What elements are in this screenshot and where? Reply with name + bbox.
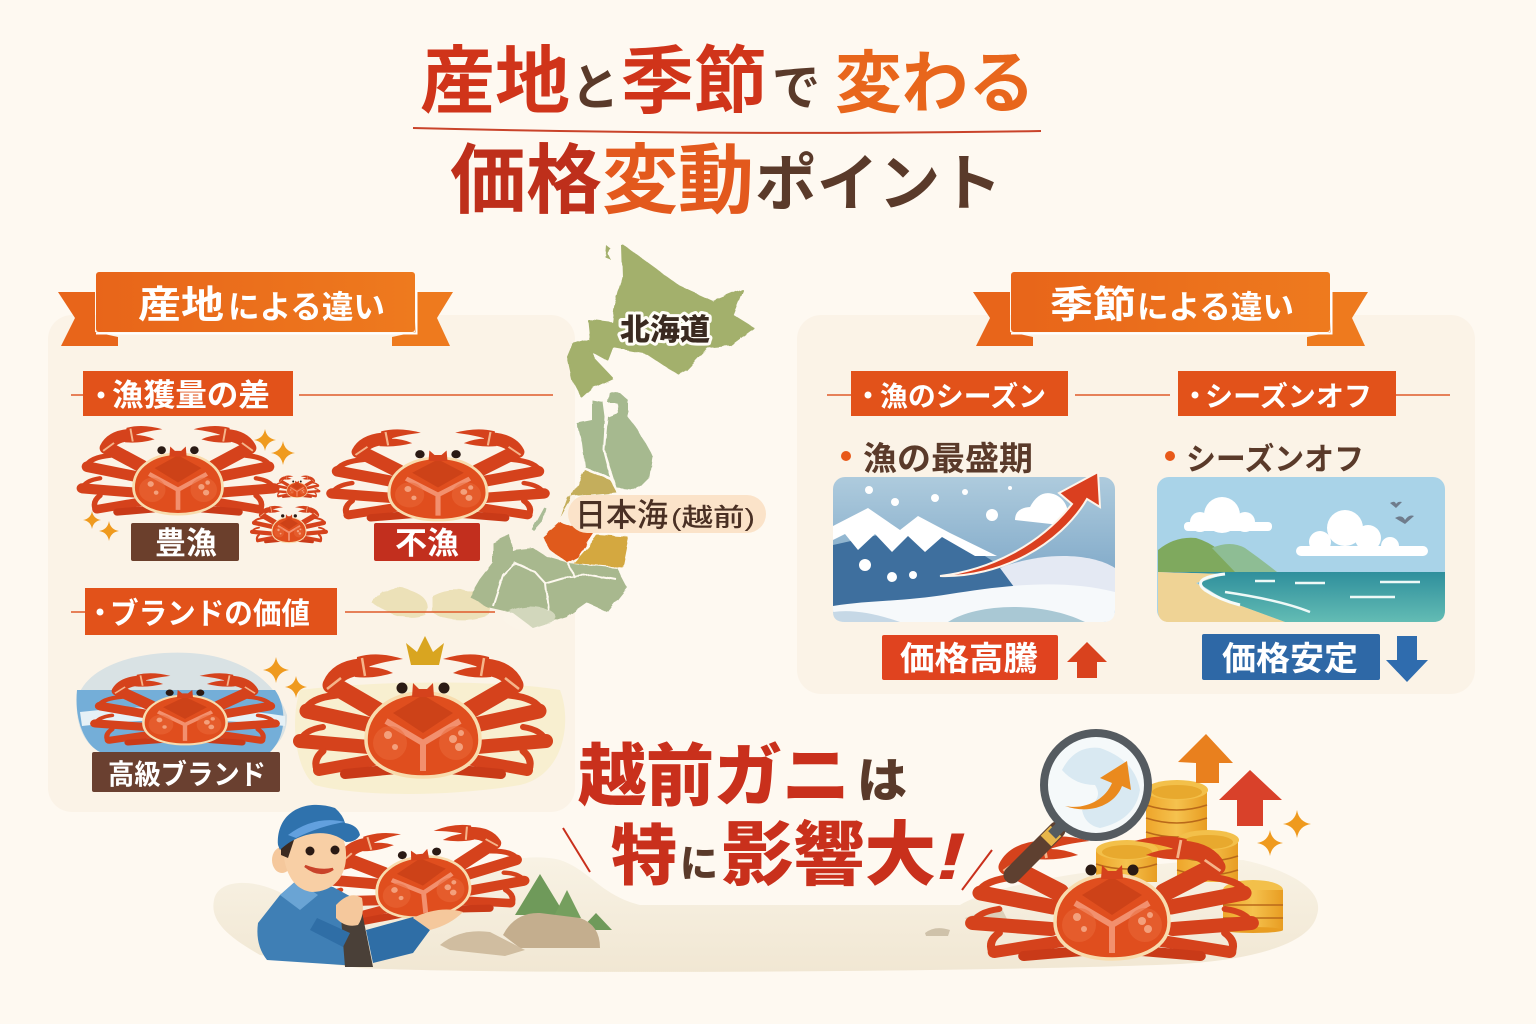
callout: Echizen crab: ! <box>936 819 966 893</box>
label: good catch <box>131 523 239 561</box>
arrow: red up <box>1219 770 1282 826</box>
sparkles: brand <box>263 657 307 698</box>
crab: held by fisherman <box>317 819 526 928</box>
sub-heading: fishing season <box>827 371 1170 416</box>
sub-heading: catch difference <box>71 371 553 416</box>
label: poor catch: 不漁 <box>395 526 459 561</box>
callout: Echizen crab: 越前ガニ <box>578 739 850 815</box>
illustration: snowy winter <box>833 477 1115 622</box>
sub-heading: catch difference: 漁獲量の差 <box>112 378 270 413</box>
fisherman head <box>272 820 346 892</box>
label: Hokkaido: 北海道 <box>620 314 710 347</box>
icon: crown <box>406 636 444 665</box>
ribbon: origin heading: 産地 <box>138 285 224 327</box>
sub-heading: off season: シーズンオフ <box>1205 380 1372 412</box>
crab: good catch <box>82 426 326 543</box>
illustration: summer beach <box>1157 477 1445 622</box>
illustration: sea crab <box>77 653 287 752</box>
sparkles: coins <box>1257 810 1311 856</box>
sub-heading: fishing season: 漁のシーズン <box>880 380 1046 412</box>
map region: Hokkaido <box>568 245 753 397</box>
ribbon: season heading <box>973 272 1368 346</box>
arrow: orange up <box>1178 734 1233 783</box>
fisherman cap <box>278 805 360 850</box>
title <box>413 40 1041 224</box>
ribbon: season heading: による違い <box>1137 289 1294 325</box>
arrow: up <box>1067 642 1107 678</box>
label: good catch: 豊漁 <box>155 526 217 561</box>
title: で <box>772 60 820 116</box>
callout: Echizen crab: に <box>680 844 718 886</box>
rocks and trees <box>440 874 1010 956</box>
ground strip <box>213 857 1318 972</box>
tag: price stable: 価格安定 <box>1222 640 1358 677</box>
title: 価格 <box>450 139 602 224</box>
title: 産地 <box>420 40 570 123</box>
sub-heading: brand value <box>71 588 495 635</box>
fisherman hands <box>336 895 463 930</box>
title: 変動 <box>602 139 754 224</box>
crab: foreground <box>973 836 1251 959</box>
ribbon: origin heading <box>58 272 453 346</box>
ribbon: origin heading: による違い <box>228 289 385 325</box>
title: 変わる <box>835 46 1035 122</box>
label: premium brand <box>92 752 280 792</box>
panel: season differences <box>797 315 1475 694</box>
icon: magnifying glass <box>1012 733 1148 875</box>
callout: Echizen crab: は <box>857 755 907 808</box>
map of Japan <box>372 245 753 630</box>
tag: price surge <box>882 635 1058 680</box>
label: Sea of Japan Echizen <box>568 495 766 533</box>
panel: origin differences <box>48 315 575 812</box>
map region: Echizen <box>543 522 593 562</box>
label: premium brand: 高級ブランド <box>108 758 266 790</box>
ribbon: season heading: 季節 <box>1050 285 1136 327</box>
arrow: down <box>1386 636 1428 682</box>
callout: Echizen crab <box>563 739 992 894</box>
label: Sea of Japan Echizen: 日本海 <box>575 497 668 533</box>
coin stacks <box>1096 780 1283 933</box>
callout: Echizen crab: 影響大 <box>722 816 936 894</box>
crab: poor catch <box>332 429 544 520</box>
illustration: crowned crab <box>295 636 565 794</box>
tag: price surge: 価格高騰 <box>900 640 1038 677</box>
heading: off season: シーズンオフ <box>1186 442 1364 477</box>
heading: peak season: 漁の最盛期 <box>863 440 1033 477</box>
title: と <box>571 60 619 116</box>
arrow: price rise <box>940 472 1100 576</box>
label: poor catch <box>374 523 480 561</box>
label: Sea of Japan Echizen: (越前) <box>671 504 755 532</box>
title: ポイント <box>755 150 1002 219</box>
title: 季節 <box>621 40 767 123</box>
sub-heading: off season <box>1178 371 1450 416</box>
sub-heading: brand value: ブランドの価値 <box>110 597 310 631</box>
character: fisherman <box>257 805 430 967</box>
callout: Echizen crab: 特 <box>611 819 677 893</box>
tag: price stable <box>1202 634 1380 680</box>
